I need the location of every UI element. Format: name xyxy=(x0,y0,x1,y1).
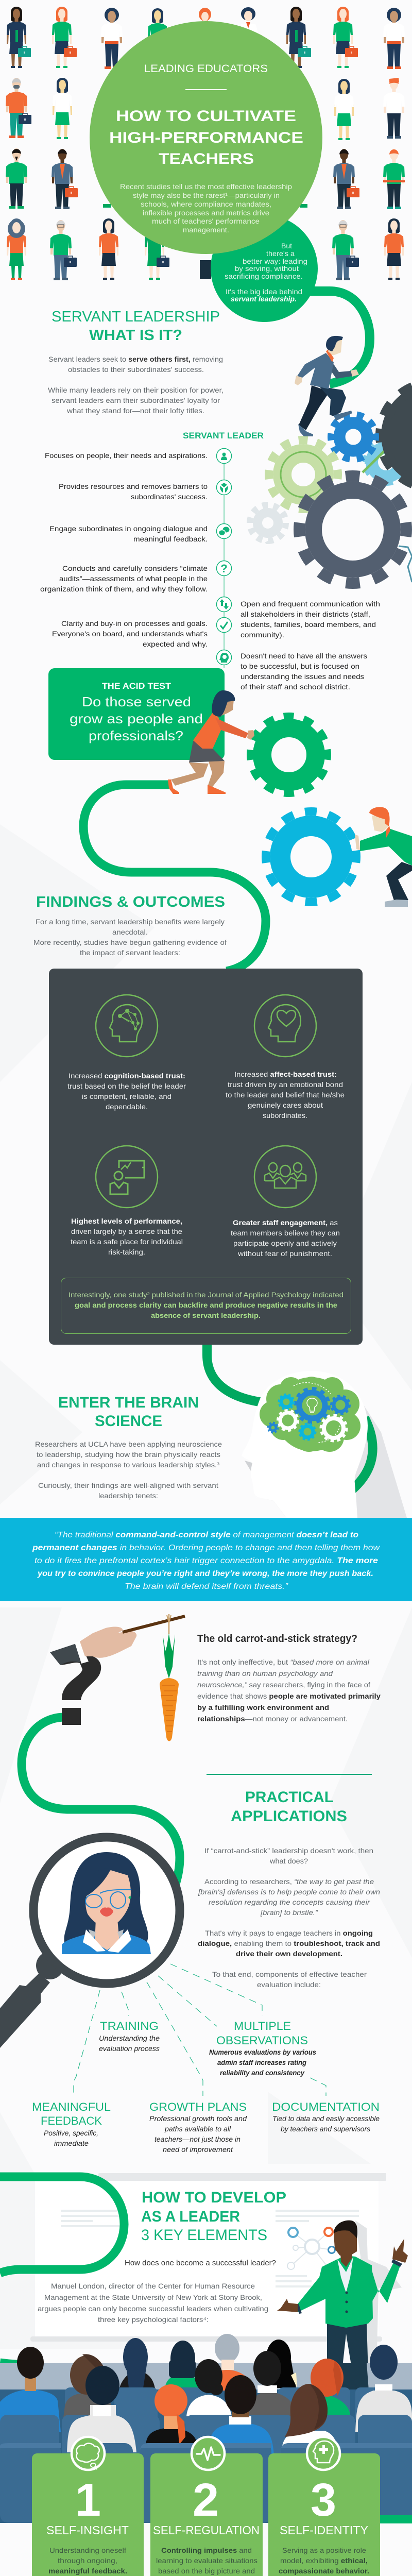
path: green connector from question mark xyxy=(22,1717,180,1886)
dark circle text: by serving, without xyxy=(235,264,299,273)
text: brain science body: leadership tenets: xyxy=(98,1492,158,1500)
item: all the answers xyxy=(241,652,367,691)
icon: magnifying glass with teacher xyxy=(0,1837,180,2048)
text: carrot-and-stick body: relationships —not money or advancement. xyxy=(197,1715,348,1723)
brain cloud xyxy=(260,1377,360,1452)
icon: question mark: ? xyxy=(220,562,228,575)
card text: Understanding oneself xyxy=(49,2546,126,2554)
component: growth plans: need of improvement xyxy=(163,2145,233,2154)
panel: quote band: The brain will defend itself from threats.” xyxy=(125,1582,288,1591)
text: manuel london: Manuel London, director of the Center for Human Resource xyxy=(51,2282,255,2290)
card text: compassionate behavior. xyxy=(279,2567,369,2575)
text: servant leadership body: Servant leaders seek to serve others first, removing xyxy=(48,355,223,363)
gears cluster xyxy=(250,385,412,583)
callout: goal and process clarity: absence of servant leadership. xyxy=(151,1311,261,1319)
figure: presenter xyxy=(277,2221,408,2391)
callout: goal and process clarity: Interestingly, one study² published in the Journal of Applied Psychology indicated xyxy=(68,1291,344,1299)
back row people xyxy=(118,2334,297,2396)
number 1: 1 xyxy=(75,2475,101,2526)
icon: plant xyxy=(216,480,232,495)
text: carrot-and-stick body: neuroscience,” say researchers, flying in the face of xyxy=(197,1681,370,1689)
text: servant leadership body: servant leaders earn their subordinates' loyalty for xyxy=(52,396,220,404)
card text: learning to evaluate situations xyxy=(156,2556,258,2565)
panel: the acid test: THE ACID TEST xyxy=(102,681,171,691)
path: green connector to findings xyxy=(83,785,266,971)
text: manuel london: Management at the State University of New York at Stony Brook, xyxy=(44,2293,262,2301)
card text xyxy=(48,2546,127,2575)
card text: Serving as a positive role xyxy=(282,2546,366,2554)
component: meaningful feedback: Positive, specific, xyxy=(44,2129,98,2137)
component: meaningful feedback: immediate xyxy=(54,2139,89,2147)
text: practical applications body: To that end, components of effective teacher xyxy=(212,1970,367,1978)
dashed connectors xyxy=(74,1964,326,2096)
component: multiple observations: MULTIPLE xyxy=(234,2020,291,2032)
icon: speech bubbles xyxy=(216,523,232,539)
title: TEACHERS xyxy=(159,150,254,167)
finding: affect-based trust: genuinely cares about xyxy=(248,1101,323,1109)
list: servant leader right column xyxy=(241,600,380,691)
dark green intro circle xyxy=(211,215,318,322)
item: clarity and buy-in: Everyone's on board, and understands what's xyxy=(52,630,208,638)
item: climate audits: audits”—assessments of what people in the xyxy=(59,574,208,583)
text: practical applications body xyxy=(198,1846,380,1989)
finding: cognition-based trust: dependable. xyxy=(106,1103,148,1111)
heading: how to develop as a leader: HOW TO DEVELOP xyxy=(142,2189,286,2206)
text: practical applications body: [brain's] defenses is to help people come to their own xyxy=(198,1888,380,1896)
panel: quote band: permanent changes in behavior. Ordering people to change and then telling them how xyxy=(32,1544,381,1552)
component: training xyxy=(99,2020,160,2053)
figure: teacher portrait xyxy=(62,1852,151,1954)
component: multiple observations: Numerous evaluations by various xyxy=(209,2048,316,2056)
card: self-identity xyxy=(268,2437,380,2576)
network diagram xyxy=(287,2228,335,2269)
icon: head with plus xyxy=(307,2437,340,2470)
text: carrot-and-stick body: training than on human psychology and xyxy=(197,1669,333,1677)
item: engage subordinates: Engage subordinates in ongoing dialogue and xyxy=(49,524,208,533)
brain gears xyxy=(268,1383,350,1443)
text: practical applications body: dialogue, enabling them to troubleshoot, track and xyxy=(198,1939,380,1947)
item: clarity and buy-in: Clarity and buy-in on processes and goals. xyxy=(61,619,208,628)
icon: thought cloud xyxy=(72,2437,105,2470)
text: findings intro: More recently, studies have begun gathering evidence of xyxy=(33,938,227,946)
intro paragraph: management. xyxy=(183,226,229,234)
item: all the answers: of their staff and school district. xyxy=(241,683,350,691)
card text: based on the big picture and xyxy=(158,2567,255,2575)
item: focuses on people: Focuses on people, their needs and aspirations. xyxy=(45,451,208,460)
text: manuel london: argues people can only become successful leaders when cultivating xyxy=(38,2304,268,2313)
row 1 figures xyxy=(7,7,405,70)
text: brain science body: and changes in response to various leadership styles.³ xyxy=(37,1461,219,1469)
intro paragraph: inflexible processes and metrics drive xyxy=(143,209,269,217)
panel: the acid test: professionals? xyxy=(89,728,183,743)
item: engage subordinates: meaningful feedback. xyxy=(133,535,208,543)
component: multiple observations xyxy=(209,2020,316,2077)
gear: cyan xyxy=(266,811,356,902)
icon: question mark arm with carrot xyxy=(50,1614,185,1741)
finding: staff engagement: without fear of punishment. xyxy=(237,1249,332,1258)
panel: the acid test: Do those served xyxy=(82,694,191,709)
figure: woman pushing gear xyxy=(168,690,254,794)
component: growth plans: Professional growth tools and xyxy=(149,2114,247,2123)
panel: findings dark panel xyxy=(49,969,363,1345)
callout: goal and process clarity xyxy=(61,1278,351,1333)
text: practical applications body: drive their own development. xyxy=(236,1950,342,1958)
gear: slate xyxy=(299,476,406,583)
intro paragraph: style may also be the rarest¹—particularly in xyxy=(133,192,280,199)
component: multiple observations: admin staff increases rating xyxy=(217,2058,306,2066)
number 3: 3 xyxy=(311,2475,336,2526)
finding: highest performance: risk-taking. xyxy=(108,1248,145,1256)
text: practical applications body: what does? xyxy=(269,1857,308,1865)
card text: meaningful feedback. xyxy=(48,2567,127,2575)
heading: old carrot-and-stick strategy: The old carrot-and-stick strategy? xyxy=(197,1633,357,1645)
dark circle text: there's a xyxy=(266,249,295,258)
finding: staff engagement: Greater staff engagement, as xyxy=(233,1218,338,1227)
text: servant leadership body: While many leaders rely on their position for power, xyxy=(48,386,224,394)
item: all the answers: to be successful, but is focused on xyxy=(241,662,359,670)
text: servant leadership body xyxy=(48,355,224,415)
title rule xyxy=(185,89,227,90)
panel: the acid test xyxy=(48,668,225,760)
row 3 figures xyxy=(6,148,405,209)
component: training: evaluation process xyxy=(99,2044,160,2053)
item: provides resources xyxy=(59,482,208,501)
text: brain science body: Researchers at UCLA have been applying neuroscience xyxy=(35,1440,222,1448)
intro paragraph: schools, where compliance mandates, xyxy=(141,200,271,208)
text: practical applications body: evaluation include: xyxy=(257,1980,321,1989)
text: carrot-and-stick body: evidence that shows people are motivated primarily xyxy=(197,1692,381,1700)
path: green loop xyxy=(0,2177,124,2273)
item: clarity and buy-in xyxy=(52,619,208,648)
figure: head with brain xyxy=(0,1371,412,2576)
heading: servant leadership: WHAT IS IT? xyxy=(89,327,182,344)
finding: affect-based trust: to the leader and belief that he/she xyxy=(226,1091,345,1099)
question: how does one become a successful leader: How does one become a successful leader? xyxy=(125,2259,276,2267)
icon: head xyxy=(216,650,232,665)
panel: quote band: to do it fires the prefrontal cortex’s hair trigger connection to the amygdala. The more xyxy=(35,1556,378,1565)
card title: SELF-REGULATION xyxy=(153,2523,260,2537)
gear: pale grey xyxy=(250,505,286,541)
item: open communication: all stakeholders in their districts (staff, xyxy=(241,610,370,618)
panel: quote band xyxy=(0,1518,412,1601)
text: carrot-and-stick body xyxy=(197,1658,381,1723)
card text: Controlling impulses and xyxy=(161,2546,252,2554)
title xyxy=(109,108,303,167)
icon: question mark xyxy=(216,561,232,576)
text: servant leadership body: obstacles to their subordinates' success. xyxy=(68,365,204,374)
finding: cognition-based trust: Increased cognition-based trust: xyxy=(68,1072,185,1080)
front row people xyxy=(67,2366,339,2458)
dark circle text xyxy=(225,242,307,303)
item: open communication: students, families, board members, and xyxy=(241,620,376,629)
item: provides resources: Provides resources and removes barriers to xyxy=(59,482,208,490)
heading: servant leadership: SERVANT LEADERSHIP xyxy=(52,309,220,325)
middle row people xyxy=(0,2345,412,2432)
heading: how to develop as a leader: AS A LEADER xyxy=(141,2208,240,2225)
icon: check xyxy=(216,617,232,633)
intro paragraph: much of teachers' performance xyxy=(152,217,260,225)
path: green connector from intro xyxy=(309,291,370,384)
back wall xyxy=(0,2363,412,2390)
row 2 figures xyxy=(6,78,405,140)
intro paragraph xyxy=(120,183,292,234)
heading: practical applications xyxy=(231,1789,347,1825)
seats row A xyxy=(65,2387,381,2424)
gear: dark large xyxy=(382,385,412,486)
seating base xyxy=(0,2389,412,2523)
finding: staff engagement: team members believe they can xyxy=(231,1229,340,1237)
card title: SELF-INSIGHT xyxy=(46,2523,129,2537)
card text xyxy=(156,2546,258,2576)
path: green connector behind head xyxy=(351,1418,373,1490)
finding: highest performance: Highest levels of performance, xyxy=(71,1217,182,1225)
text: practical applications body: That's why it pays to engage teachers in ongoing xyxy=(205,1929,373,1937)
card: self-insight xyxy=(32,2437,144,2576)
text: findings intro: For a long time, servant leadership benefits were largely xyxy=(36,918,225,926)
finding: highest performance xyxy=(71,1146,183,1256)
text: servant leadership body: what they stand for—not their lofty titles. xyxy=(66,406,204,415)
dark circle text: better way: leading xyxy=(243,257,307,265)
eyebrow: leading educators: LEADING EDUCATORS xyxy=(144,63,268,75)
card title: SELF-IDENTITY xyxy=(280,2523,368,2537)
audience xyxy=(0,2334,412,2523)
component: meaningful feedback xyxy=(32,2100,111,2147)
item: climate audits: organization think of them, and why they follow. xyxy=(40,585,208,593)
path: green connector to brain xyxy=(207,1345,263,1402)
component: documentation: by teachers and supervisors xyxy=(281,2125,370,2133)
list: servant leader left column xyxy=(40,451,208,648)
item: open communication xyxy=(241,600,380,639)
finding: cognition-based trust: trust based on the belief the leader xyxy=(67,1082,186,1090)
item: climate audits xyxy=(40,564,208,593)
component: documentation: Tied to data and easily accessible xyxy=(272,2114,380,2123)
seats row B xyxy=(0,2415,412,2461)
item: open communication: community). xyxy=(241,631,284,639)
component: growth plans xyxy=(149,2100,247,2154)
item: provides resources: subordinates' success. xyxy=(131,493,208,501)
heading: how to develop as a leader xyxy=(141,2189,286,2244)
text: brain science body: to leadership, studying how the brain physically reacts xyxy=(37,1450,220,1459)
dark circle text: It's the big idea behind xyxy=(226,287,302,296)
panel: projector screen xyxy=(30,2173,386,2342)
gear: green bar xyxy=(363,447,389,472)
component: documentation xyxy=(272,2100,380,2133)
component: multiple observations: OBSERVATIONS xyxy=(216,2034,308,2047)
callout: goal and process clarity: goal and process clarity can backfire and produce negative results in the xyxy=(75,1301,337,1309)
dark circle text: sacrificing compliance. xyxy=(225,272,303,280)
seats row C xyxy=(0,2443,412,2523)
light green title circle xyxy=(90,21,322,254)
finding: affect-based trust: Increased affect-based trust: xyxy=(234,1070,337,1078)
component: training: Understanding the xyxy=(99,2034,160,2042)
text: practical applications body: resolution regarding the concepts causing their xyxy=(209,1898,370,1906)
text: manuel london: three key psychological factors⁴: xyxy=(98,2315,209,2324)
heading: servant leadership xyxy=(52,309,220,344)
timeline line xyxy=(224,456,225,668)
component: growth plans: paths available to all xyxy=(164,2125,231,2133)
practical rule xyxy=(207,1774,372,1775)
row 4 figures xyxy=(7,218,404,280)
dark circle text: But xyxy=(281,242,292,250)
panel: quote band: “The traditional command-and-control style of management doesn’t lead to xyxy=(55,1531,358,1539)
finding: cognition-based trust: is competent, reliable, and xyxy=(82,1092,171,1100)
heading: practical applications: APPLICATIONS xyxy=(231,1808,347,1825)
card: self-regulation xyxy=(150,2437,263,2576)
heading: enter the brain science: SCIENCE xyxy=(95,1413,162,1430)
people grid xyxy=(6,7,405,280)
text: practical applications body: According to researchers, “the way to get past the xyxy=(204,1877,374,1886)
text: carrot-and-stick body: It's not only ineffective, but “based more on animal xyxy=(197,1658,370,1666)
gear: light blue xyxy=(365,440,408,484)
component: documentation: DOCUMENTATION xyxy=(272,2100,380,2113)
finding: cognition-based trust xyxy=(67,995,186,1111)
text: findings intro xyxy=(33,918,227,957)
text: carrot-and-stick body: by a fulfilling work environment and xyxy=(197,1703,329,1711)
finding: affect-based trust: trust driven by an emotional bond xyxy=(228,1080,343,1089)
item: clarity and buy-in: expected and why. xyxy=(143,640,208,648)
component: meaningful feedback: FEEDBACK xyxy=(41,2114,102,2127)
item: climate audits: Conducts and carefully considers “climate xyxy=(62,564,208,572)
figure: man climbing xyxy=(295,336,359,436)
item: engage subordinates xyxy=(49,524,208,543)
finding: staff engagement xyxy=(231,1146,340,1258)
gear: pale green xyxy=(269,440,338,509)
finding: highest performance: driven largely by a sense that the xyxy=(71,1227,182,1235)
icon: up down arrows xyxy=(216,597,232,612)
gear: blue xyxy=(331,414,376,460)
timeline icons xyxy=(216,448,232,665)
item: open communication: Open and frequent communication with xyxy=(241,600,380,608)
component: training: TRAINING xyxy=(100,2020,159,2032)
heading: practical applications: PRACTICAL xyxy=(245,1789,334,1806)
text: practical applications body: [brain] to bristle.” xyxy=(260,1908,318,1917)
title: HIGH-PERFORMANCE xyxy=(109,129,303,146)
finding: staff engagement: participate openly and actively xyxy=(233,1239,337,1247)
text: practical applications body: If “carrot-and-stick” leadership doesn't work, then xyxy=(204,1846,373,1855)
icon: person xyxy=(216,448,232,464)
item: all the answers: understanding the issues and needs xyxy=(241,672,364,681)
card text: through ongoing, xyxy=(58,2556,117,2565)
card text: model, exhibiting ethical, xyxy=(280,2556,368,2565)
text: findings intro: anecdotal. xyxy=(112,928,148,936)
heading: findings and outcomes: FINDINGS & OUTCOMES xyxy=(36,894,225,910)
intro paragraph: Recent studies tell us the most effective leadership xyxy=(120,183,292,191)
green connector tail right of audience xyxy=(380,2515,412,2523)
component: multiple observations: reliability and consistency xyxy=(220,2069,305,2077)
green stub behind audience xyxy=(0,2363,31,2365)
gear: green xyxy=(250,716,328,793)
heading: enter the brain science xyxy=(58,1394,199,1430)
card text xyxy=(279,2546,369,2575)
panel: quote band: you try to convince people you’re right and they’re wrong, the more they push back. xyxy=(37,1569,373,1578)
item: all the answers: Doesn't need to have all the answers xyxy=(241,652,367,660)
number 2: 2 xyxy=(193,2475,219,2526)
finding: affect-based trust xyxy=(226,995,345,1120)
text: brain science body xyxy=(35,1440,222,1500)
dark circle text: servant leadership. xyxy=(231,295,297,303)
heading: how to develop as a leader: 3 KEY ELEMENTS xyxy=(141,2227,267,2244)
text: findings intro: the impact of servant leaders: xyxy=(80,948,180,957)
component: growth plans: teachers—not just those in xyxy=(154,2135,241,2143)
component: meaningful feedback: MEANINGFUL xyxy=(32,2100,111,2113)
finding: affect-based trust: subordinates. xyxy=(263,1111,307,1120)
figure: man pushing gear xyxy=(355,807,412,907)
component: growth plans: GROWTH PLANS xyxy=(149,2100,247,2113)
heading: enter the brain science: ENTER THE BRAIN xyxy=(58,1394,199,1411)
gear: teal outline xyxy=(399,546,412,582)
text: manuel london xyxy=(38,2282,268,2324)
label: servant leader: SERVANT LEADER xyxy=(183,431,264,440)
icon: pulse xyxy=(192,2437,225,2470)
finding: highest performance: team is a safe place for individual xyxy=(71,1238,183,1246)
panel: the acid test: grow as people and xyxy=(70,711,203,726)
text: brain science body: Curiously, their findings are well-aligned with servant xyxy=(38,1481,218,1489)
title: HOW TO CULTIVATE xyxy=(116,108,296,125)
